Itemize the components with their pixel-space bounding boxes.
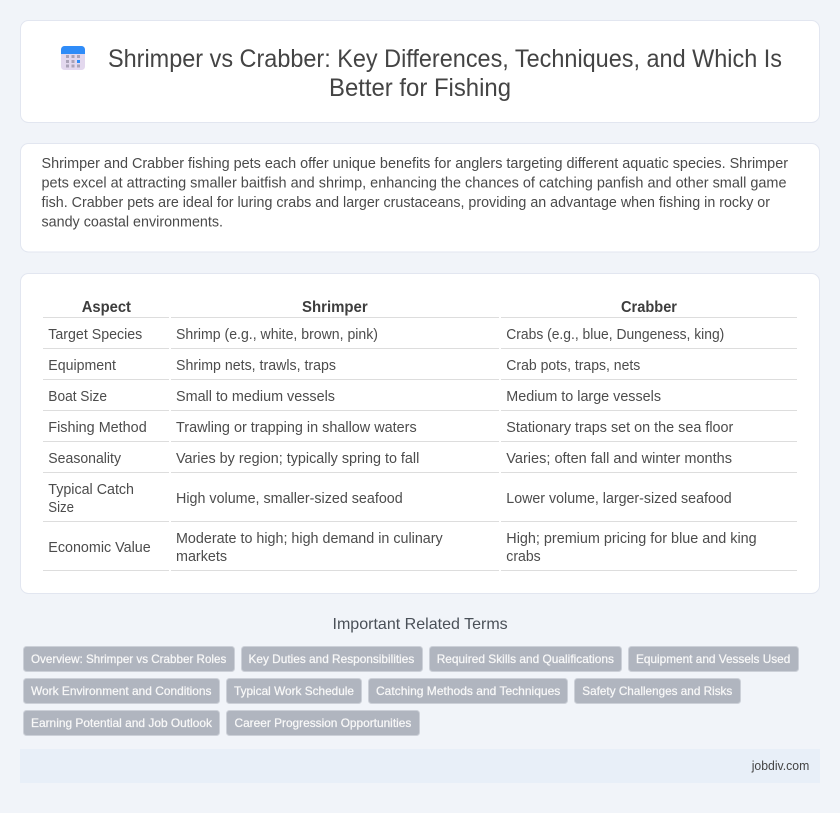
tag: [24, 646, 234, 672]
table row: typical catch size: [43, 482, 797, 522]
tag: Catching Methods and Techniques: [376, 684, 560, 698]
table row: equipment: [43, 358, 797, 380]
table row: economic value: Moderate to high; high demand in culinary: [176, 531, 443, 547]
table row: seasonality: Varies; often fall and winter months: [506, 451, 732, 467]
table row: economic value: Economic Value: [48, 540, 151, 556]
table row: target species: [43, 327, 797, 349]
tag: [226, 710, 420, 736]
table row: equipment: Crab pots, traps, nets: [506, 358, 640, 374]
table row: boat size: Small to medium vessels: [176, 389, 335, 405]
tag: Work Environment and Conditions: [31, 684, 212, 698]
table row: equipment: Equipment: [48, 358, 116, 374]
table row: typical catch size: Lower volume, larger-sized seafood: [506, 491, 732, 507]
tag: Equipment and Vessels Used: [636, 652, 790, 666]
table row: target species: Shrimp (e.g., white, brown, pink): [176, 327, 378, 343]
table row: boat size: Medium to large vessels: [506, 389, 661, 405]
text block: introduction: sandy coastal environments.: [42, 214, 223, 230]
table row: seasonality: Varies by region; typically spring to fall: [176, 451, 419, 467]
table row: target species: Target Species: [48, 327, 142, 343]
table row: economic value: High; premium pricing for blue and king: [506, 531, 757, 547]
text block: introduction: Shrimper and Crabber fishing pets each offer unique benefits for anglers targeting different aquatic species. Shrimper: [42, 156, 788, 172]
table row: typical catch size: Size: [48, 500, 74, 516]
tags: related terms: [24, 646, 798, 736]
text block: introduction: fish. Crabber pets are ideal for luring crabs and larger crustaceans, providing an advantage when fishing in rocky or: [42, 195, 770, 211]
table row: economic value: markets: [176, 549, 227, 565]
table row: boat size: [43, 389, 797, 411]
tag: [368, 678, 568, 704]
tag: [24, 678, 220, 704]
tag: [242, 646, 422, 672]
icon: calendar: [61, 46, 85, 70]
table header row: Crabber: [621, 299, 677, 316]
title: [108, 45, 782, 102]
tag: Typical Work Schedule: [234, 684, 354, 698]
tag: Career Progression Opportunities: [234, 716, 411, 730]
tag: Key Duties and Responsibilities: [248, 652, 414, 666]
table row: boat size: Boat Size: [48, 389, 107, 405]
tag: [574, 678, 740, 704]
footer: [20, 749, 820, 783]
table row: target species: Crabs (e.g., blue, Dungeness, king): [506, 327, 724, 343]
table header row: Aspect: [82, 299, 132, 316]
tag: Safety Challenges and Risks: [582, 684, 732, 698]
title: Better for Fishing: [329, 74, 511, 102]
table row: seasonality: Seasonality: [48, 451, 122, 467]
table row: fishing method: Fishing Method: [48, 420, 147, 436]
table row: economic value: crabs: [506, 549, 541, 565]
tag: Overview: Shrimper vs Crabber Roles: [31, 652, 226, 666]
text block: introduction: [42, 156, 788, 230]
table row: typical catch size: High volume, smaller-sized seafood: [176, 491, 403, 507]
panel: header: [20, 20, 820, 122]
tag: [628, 646, 798, 672]
heading: important related terms: Important Related Terms: [332, 616, 508, 633]
tag: Earning Potential and Job Outlook: [31, 716, 213, 730]
panel: introduction: [20, 144, 820, 252]
table row: typical catch size: Typical Catch: [48, 482, 134, 498]
footer: jobdiv.com: [751, 758, 809, 773]
table header row: Shrimper: [302, 299, 368, 316]
table row: seasonality: [43, 451, 797, 473]
table row: economic value: [43, 531, 797, 571]
tag: [226, 678, 362, 704]
panel: comparison table: [20, 274, 820, 594]
table row: fishing method: Trawling or trapping in shallow waters: [176, 420, 417, 436]
table row: equipment: Shrimp nets, trawls, traps: [176, 358, 336, 374]
tag: Required Skills and Qualifications: [437, 652, 614, 666]
tag: [24, 710, 220, 736]
tag: [430, 646, 622, 672]
text block: introduction: pets excel at attracting smaller baitfish and shrimp, enhancing the chances of catching panfish and other small game: [42, 176, 786, 192]
table row: fishing method: [43, 420, 797, 442]
title: Shrimper vs Crabber: Key Differences, Techniques, and Which Is: [108, 45, 782, 73]
table header row: [43, 299, 797, 318]
table row: fishing method: Stationary traps set on the sea floor: [506, 420, 733, 436]
